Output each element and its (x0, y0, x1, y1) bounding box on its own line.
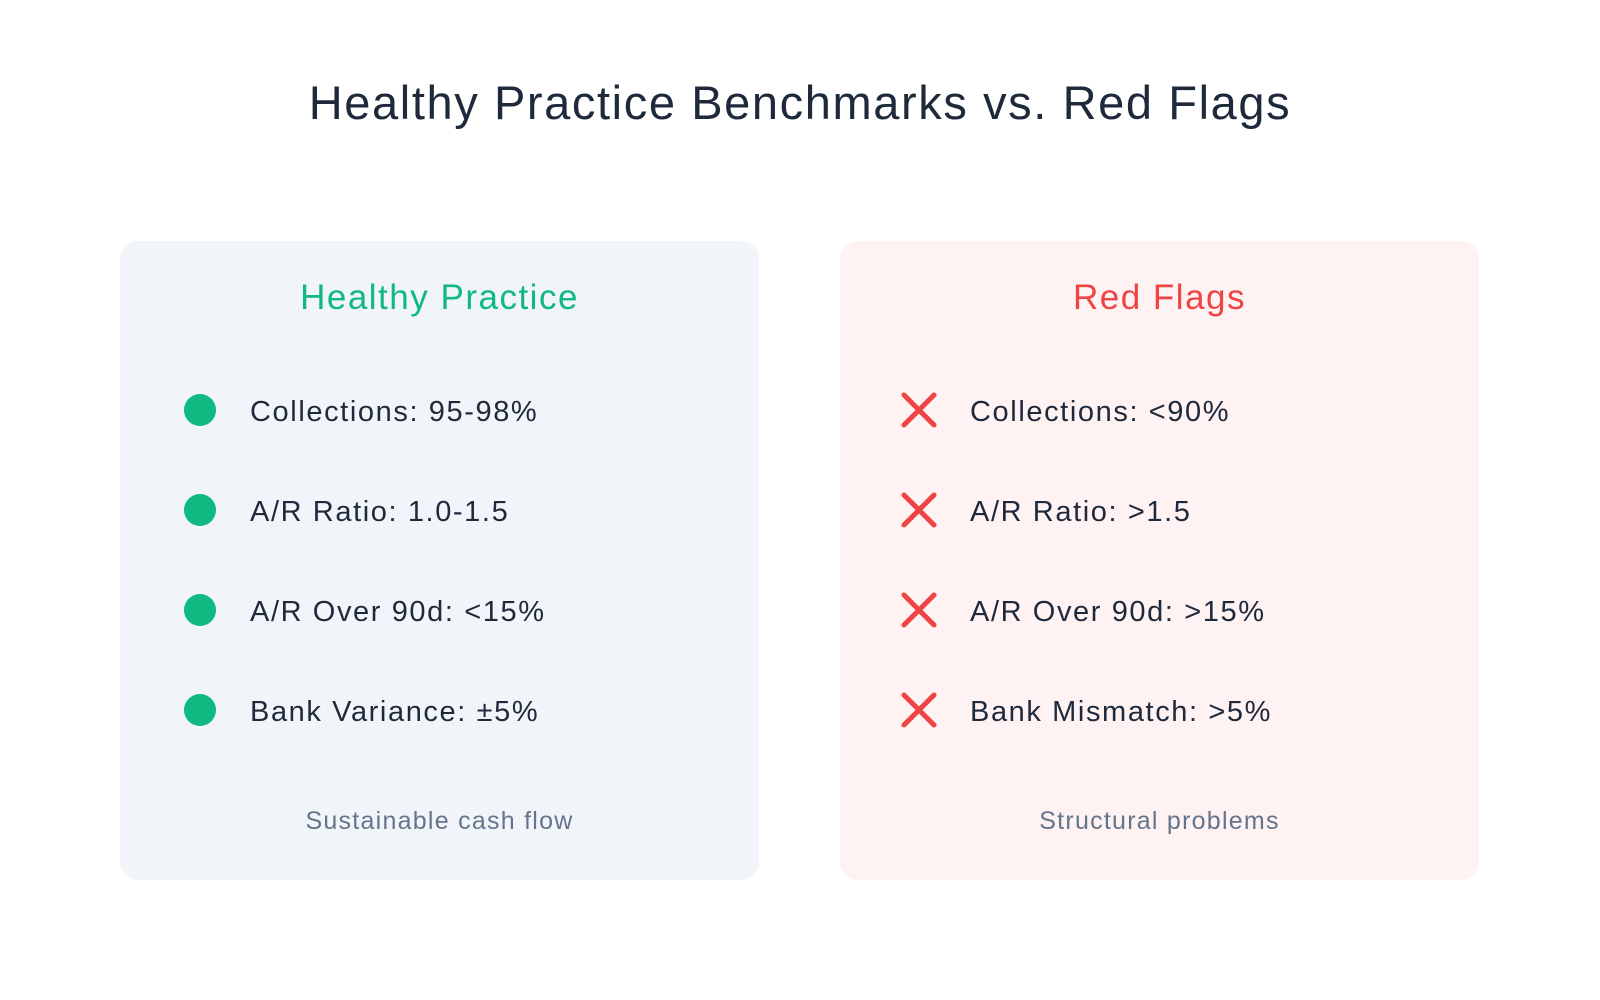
item: A/R over 90d: A/R Over 90d: <15% (250, 596, 546, 628)
panel: healthy practice (120, 241, 759, 880)
item: bank variance: Bank Variance: ±5% (250, 696, 539, 728)
item: collections: Collections: <90% (970, 396, 1230, 428)
item: A/R ratio: A/R Ratio: 1.0-1.5 (250, 496, 509, 528)
item: bank mismatch: Bank Mismatch: >5% (970, 696, 1272, 728)
item: A/R ratio: A/R Ratio: >1.5 (970, 496, 1191, 528)
panel: red flags (840, 241, 1479, 880)
heading: red flags: Red Flags (1073, 278, 1246, 317)
footer: structural problems: Structural problems (1039, 807, 1280, 835)
item: collections: Collections: 95-98% (250, 396, 538, 428)
heading: healthy practice: Healthy Practice (300, 278, 579, 317)
footer: sustainable cash flow: Sustainable cash flow (305, 807, 574, 835)
item: A/R ratio (902, 492, 1191, 528)
title: Healthy Practice Benchmarks vs. Red Flags (309, 76, 1291, 129)
item: A/R over 90d: A/R Over 90d: >15% (970, 596, 1266, 628)
